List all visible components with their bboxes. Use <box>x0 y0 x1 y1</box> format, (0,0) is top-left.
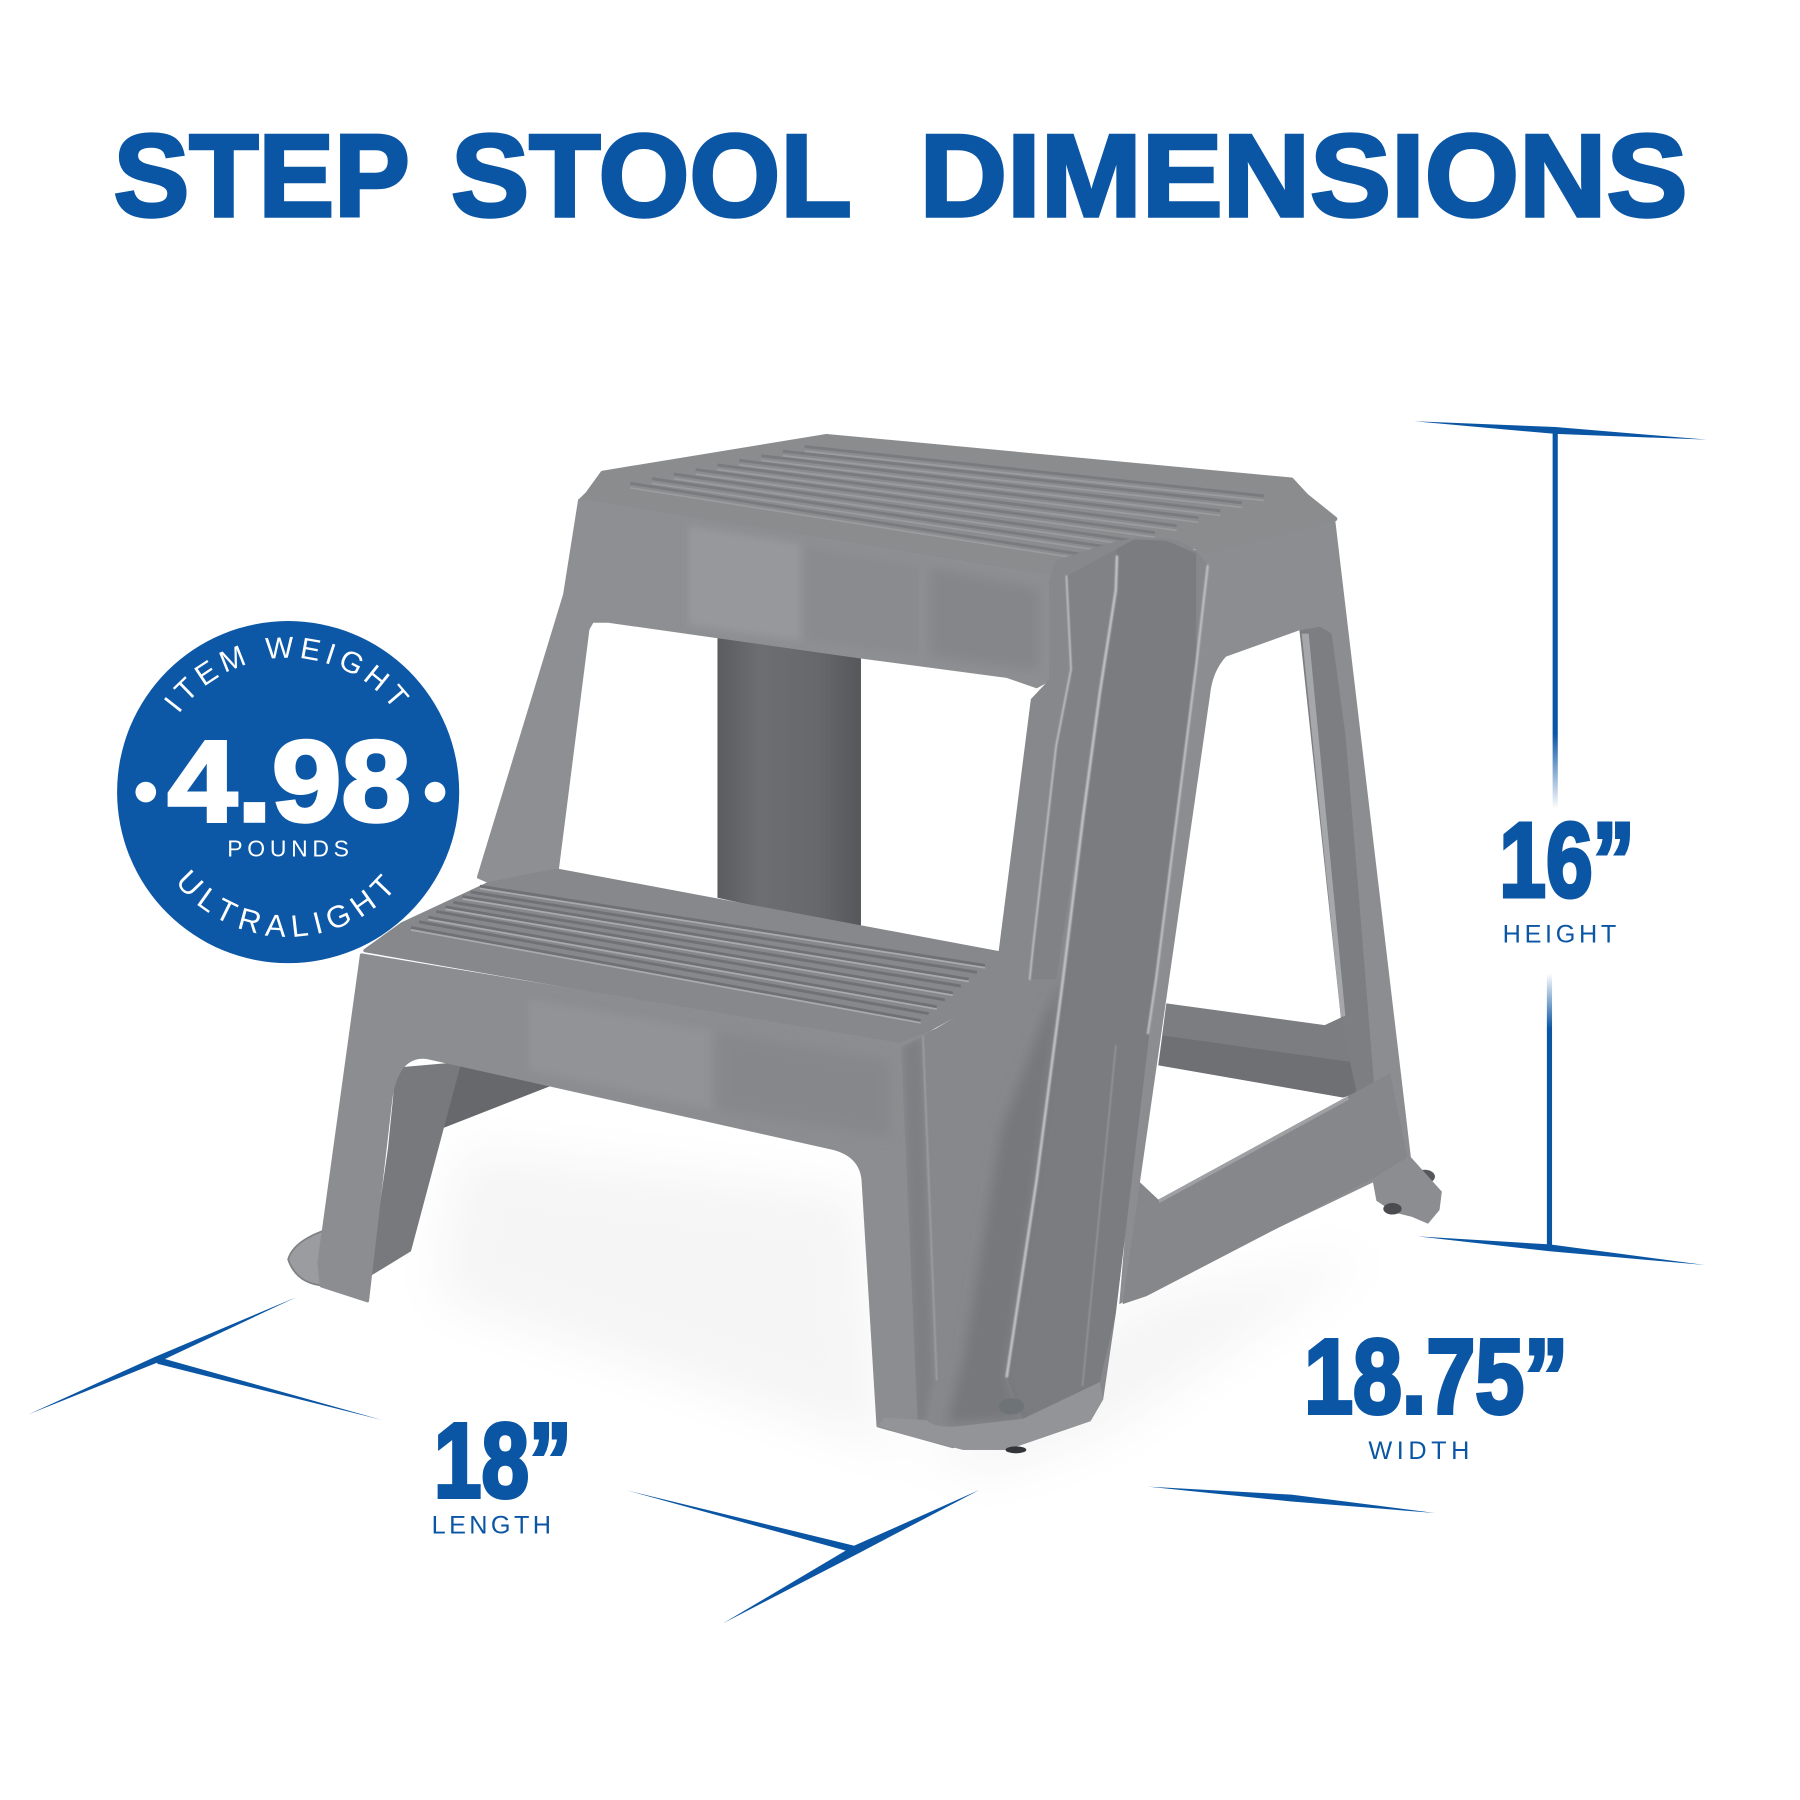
height value: 16” <box>1499 802 1635 920</box>
back pillar <box>717 626 861 930</box>
title: STOOL <box>451 110 852 241</box>
title: STEP <box>114 110 410 241</box>
width tick <box>1148 1487 1435 1513</box>
weight badge <box>117 621 460 964</box>
length dimension <box>29 1297 979 1623</box>
inner leg strip <box>1299 627 1374 1093</box>
lower step front and legs <box>319 955 987 1446</box>
lower face shading <box>528 999 712 1109</box>
pillar base button <box>999 1398 1024 1414</box>
rear crossbar <box>1158 1003 1357 1097</box>
top step surface <box>581 436 1335 576</box>
foot disc <box>288 1228 331 1286</box>
rubber foot <box>1383 1203 1402 1215</box>
base rubber foot <box>1006 1446 1026 1453</box>
badge bullets <box>135 782 445 802</box>
length value: 18” <box>434 1402 572 1520</box>
height line upper <box>1553 430 1558 809</box>
height top tick <box>1414 421 1707 440</box>
length left ticks <box>29 1297 382 1420</box>
lower side bar <box>1123 1073 1407 1304</box>
height dimension <box>1414 421 1707 1265</box>
height label: HEIGHT <box>1503 920 1616 948</box>
width value: 18.75” <box>1304 1318 1568 1436</box>
upper front face <box>479 501 1049 889</box>
length right ticks <box>626 1490 979 1623</box>
length label: LENGTH <box>432 1512 551 1540</box>
pillar shading <box>905 540 1196 1423</box>
height bottom tick <box>1418 1236 1705 1265</box>
step stool <box>288 436 1442 1453</box>
upper face panels <box>689 526 800 641</box>
title: DIMENSIONS <box>920 110 1688 241</box>
badge bottom arc: ULTRALIGHT <box>179 870 392 937</box>
side foot <box>1414 1170 1435 1184</box>
title <box>114 110 1688 241</box>
pillar base rim <box>878 1382 1103 1450</box>
width label: WIDTH <box>1368 1437 1469 1465</box>
pillar highlights <box>923 557 1208 1386</box>
right side panel <box>1119 519 1442 1304</box>
inner left leg <box>370 1062 461 1277</box>
rear left crossbar <box>442 1058 562 1128</box>
width dimension <box>1148 1318 1568 1513</box>
badge value: 4.98 <box>168 718 411 846</box>
front pillar <box>901 538 1208 1450</box>
badge top arc: ITEM WEIGHT <box>164 636 410 712</box>
badge unit: POUNDS <box>227 835 349 861</box>
floor shadow <box>436 1148 1378 1475</box>
height line lower <box>1547 973 1552 1249</box>
lower step surface <box>365 870 999 1045</box>
